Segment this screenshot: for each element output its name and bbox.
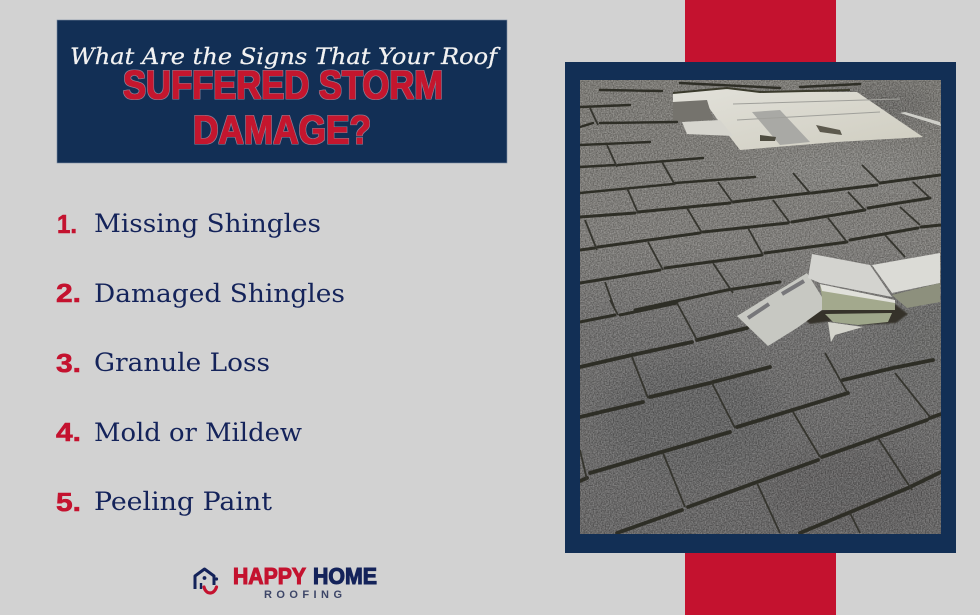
shingle piece centre [808, 254, 892, 297]
item 4: Mold or Mildew [94, 418, 303, 447]
title line: question intro: What Are the Signs That Your Roof [70, 45, 501, 70]
exposed white chip [828, 322, 863, 342]
title line: suffered storm: SUFFERED STORM [123, 64, 443, 108]
item 3: Granule Loss [94, 348, 270, 377]
shingle piece right [872, 253, 940, 293]
red vertical band [685, 0, 836, 615]
roof base [580, 80, 941, 534]
item 5: Peeling Paint [94, 487, 272, 516]
torn-off area exposing underlayment [673, 88, 941, 150]
folded green underside [820, 285, 895, 310]
shingle joint lines [580, 108, 930, 533]
shingle piece left [737, 273, 822, 346]
item 3: 3. [56, 348, 81, 378]
logo: Happy Home Roofing [195, 563, 377, 601]
photo: storm-damaged shingle roof [580, 80, 980, 535]
item 5: 5. [56, 487, 81, 517]
item 1: 1. [57, 209, 77, 239]
item 4: 4. [56, 417, 81, 447]
logo word: happy: HAPPY [233, 563, 306, 589]
grain texture [580, 80, 941, 534]
logo word: roofing: ROOFING [264, 589, 342, 601]
item 2: Damaged Shingles [94, 279, 345, 308]
tone patches [624, 86, 929, 420]
title line: damage: DAMAGE? [193, 108, 371, 152]
logo word: home: HOME [313, 563, 377, 589]
photo frame [565, 62, 956, 553]
item 2: 2. [56, 278, 81, 308]
icon: house with smile [195, 569, 218, 593]
list of storm damage signs [56, 209, 345, 517]
title banner [57, 20, 507, 163]
item 1: Missing Shingles [94, 209, 321, 238]
loose torn shingles [737, 253, 940, 346]
shingle course lines [580, 83, 941, 533]
